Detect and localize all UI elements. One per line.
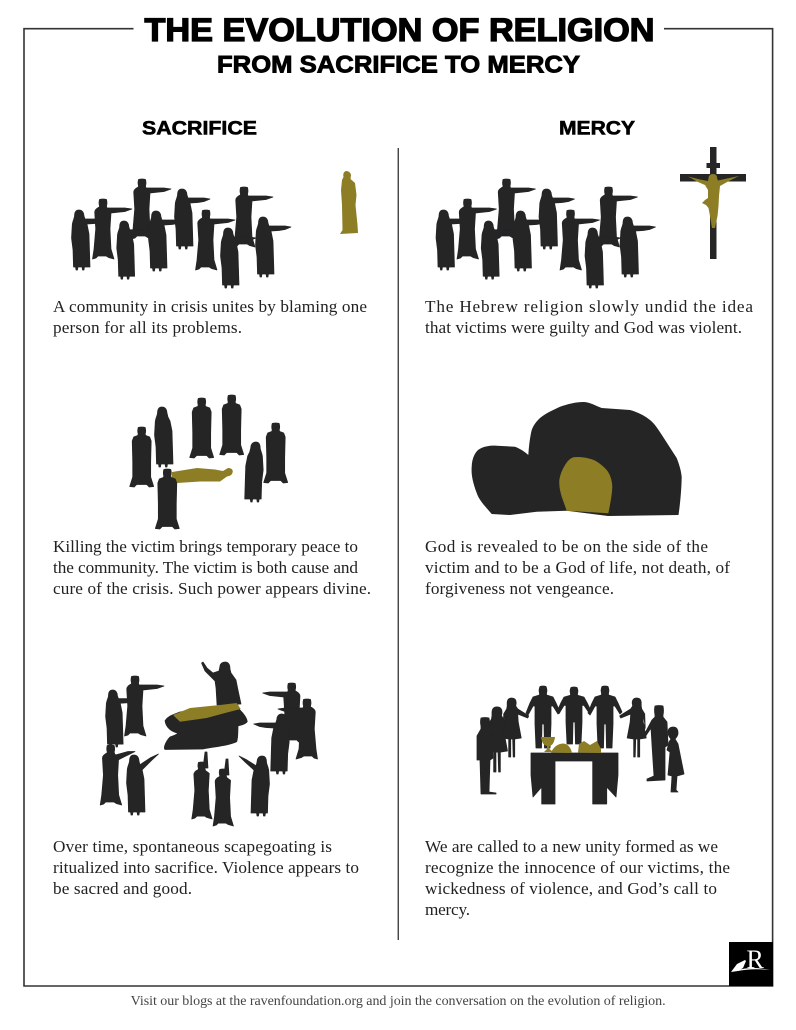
pointing figures, right <box>251 756 270 816</box>
text: hebrew religion: that victims were guilty and God was violent. <box>425 318 742 337</box>
text: over time: be sacred and good. <box>53 879 192 898</box>
text: new unity: mercy. <box>425 900 470 919</box>
text: over time <box>53 837 359 898</box>
text: killing the victim: cure of the crisis. Such power appears divine. <box>53 579 371 598</box>
text: new unity <box>425 837 730 919</box>
text: new unity: We are called to a new unity formed as we <box>425 837 718 856</box>
pointing figures, left <box>106 690 139 747</box>
scene: killing the victim <box>130 395 288 529</box>
text: god revealed: forgiveness not vengeance. <box>425 579 614 598</box>
left man <box>477 718 496 794</box>
logo: raven R: R <box>746 945 764 974</box>
text: hebrew religion <box>425 297 753 337</box>
icon: gold victim lying <box>172 468 233 483</box>
figures with raised arms <box>192 762 212 819</box>
text: new unity: recognize the innocence of our victims, the <box>425 858 730 877</box>
icon: crucifix <box>680 147 746 259</box>
subtitle: FROM SACRIFICE TO MERCY <box>217 52 580 79</box>
child <box>667 727 684 792</box>
text: over time: Over time, spontaneous scapegoating is <box>53 837 332 856</box>
heading: sacrifice: SACRIFICE <box>142 118 257 140</box>
icon: gold victim standing <box>340 171 358 234</box>
text: killing the victim: the community. The victim is both cause and <box>53 558 358 577</box>
text: community in crisis: person for all its problems. <box>53 318 242 337</box>
right man <box>644 706 668 781</box>
gold victim on altar <box>173 703 241 722</box>
scene: ritual sacrifice <box>100 662 318 826</box>
text: killing the victim <box>53 537 371 598</box>
scene: crowd blaming one person <box>72 171 358 288</box>
scene: table with people holding hands <box>477 686 684 804</box>
icon: empty tomb <box>472 402 682 516</box>
title: THE EVOLUTION OF RELIGION <box>144 12 654 48</box>
text: god revealed: God is revealed to be on the side of the <box>425 537 708 556</box>
text: god revealed: victim and to be a God of life, not death, of <box>425 558 730 577</box>
chalice and bread <box>541 737 601 753</box>
heading: mercy: MERCY <box>559 118 635 140</box>
rock altar <box>164 703 247 750</box>
logo: raven R <box>729 942 773 986</box>
text: god revealed <box>425 537 730 598</box>
footer text: Visit our blogs at the ravenfoundation.org and join the conversation on the evolution of religion. <box>131 994 666 1009</box>
text: community in crisis <box>53 297 367 337</box>
scene: crowd facing the cross <box>436 147 746 288</box>
column divider <box>398 148 399 940</box>
text: killing the victim: Killing the victim brings temporary peace to <box>53 537 358 556</box>
priest with knife <box>202 662 241 705</box>
altar table <box>531 753 618 804</box>
text: community in crisis: A community in crisis unites by blaming one <box>53 297 367 316</box>
text: over time: ritualized into sacrifice. Violence appears to <box>53 858 359 877</box>
text: hebrew religion: The Hebrew religion slowly undid the idea <box>425 297 753 316</box>
tomb opening <box>559 457 612 513</box>
text: new unity: wickedness of violence, and God’s call to <box>425 879 717 898</box>
